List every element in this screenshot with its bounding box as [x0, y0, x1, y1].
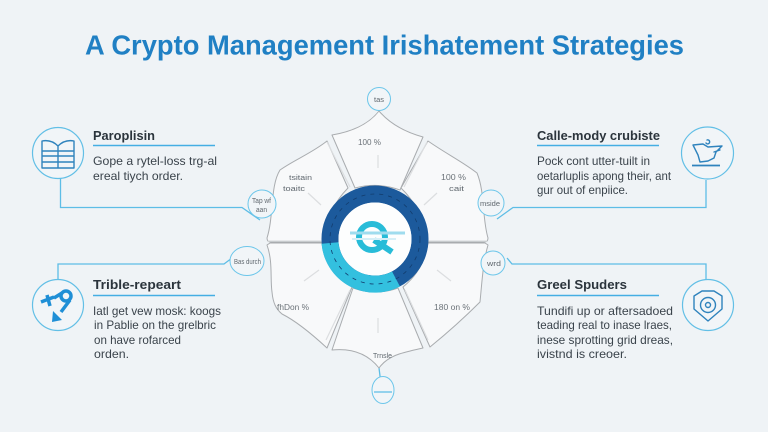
segment: top: 100 %	[358, 137, 381, 147]
text block: Pock cont utter-tuilt in	[537, 154, 650, 168]
connector lines	[58, 111, 706, 384]
panel: bottom right	[537, 277, 734, 361]
segment: upper left: toaitc	[283, 186, 306, 193]
heading: Greel Spuders	[537, 277, 627, 292]
ring	[330, 194, 420, 284]
heading: Calle-mody crubiste	[537, 128, 660, 143]
segment: upper right: 100 %	[441, 172, 466, 182]
segment: upper left	[267, 141, 350, 242]
panel: top right: oetarluplis apong their, ant	[537, 169, 672, 183]
panel: bottom left: on have rofarced	[94, 333, 181, 347]
panel: top left	[32, 128, 217, 183]
icon: bull	[682, 127, 734, 179]
segment: bottom: Trnsle	[373, 353, 392, 360]
segment: lower right: 180 on %	[434, 302, 470, 312]
central radial diagram	[267, 111, 488, 368]
small node: lower right: wrd	[486, 261, 501, 268]
small node: upper right	[478, 190, 504, 216]
panel: bottom right: teading real to inase lraes,	[537, 318, 672, 332]
segment: upper left: tsitain	[289, 175, 312, 182]
segment: upper right	[401, 141, 488, 242]
small node: lower left	[230, 246, 264, 276]
small node: top	[368, 88, 390, 110]
icon: open book	[32, 128, 84, 178]
segment: upper right: cait	[449, 186, 464, 193]
text block: Tundifi up or aftersadoed	[537, 304, 673, 318]
segment: bottom	[332, 288, 423, 368]
segment: lower left	[267, 243, 352, 348]
panel: bottom left: in Pablie on the grelbric	[94, 318, 216, 332]
segment: lower right	[403, 243, 488, 347]
panel: bottom left	[32, 277, 221, 361]
small node: top: tas	[374, 97, 385, 104]
panel: bottom right: inese sprotting grid dreas,	[537, 333, 673, 347]
small node: upper left: Tap wf	[252, 198, 271, 205]
small node: lower right	[481, 251, 505, 275]
icon: rocket	[32, 280, 84, 330]
panel: top right	[537, 127, 734, 197]
heading: Paroplisin	[93, 128, 155, 143]
small node: bottom	[372, 376, 394, 404]
text block: Iatl get vew mosk: koogs	[93, 304, 221, 318]
heading: Trible-repeart	[93, 277, 182, 292]
panel: top left: ereal tiych order.	[93, 169, 183, 183]
segment: lower left: fhDon %	[277, 302, 309, 312]
icon: shield	[682, 280, 734, 330]
small node: upper left: aan	[256, 207, 267, 214]
center logo Q	[350, 224, 405, 252]
small node: lower left: Bas durch	[234, 259, 261, 266]
horizontal separators	[268, 240, 487, 242]
segment: top	[332, 111, 423, 190]
small node: upper left	[248, 190, 276, 218]
small node: upper right: mside	[480, 201, 500, 208]
panel: bottom right: ivistnd is creoer.	[537, 347, 627, 361]
text block: Gope a rytel-loss trg-al	[93, 154, 217, 168]
title: A Crypto Management Irishatement Strategies	[85, 30, 684, 60]
panel: bottom left: orden.	[94, 347, 129, 361]
panel: top right: gur out of enpiice.	[537, 183, 628, 197]
